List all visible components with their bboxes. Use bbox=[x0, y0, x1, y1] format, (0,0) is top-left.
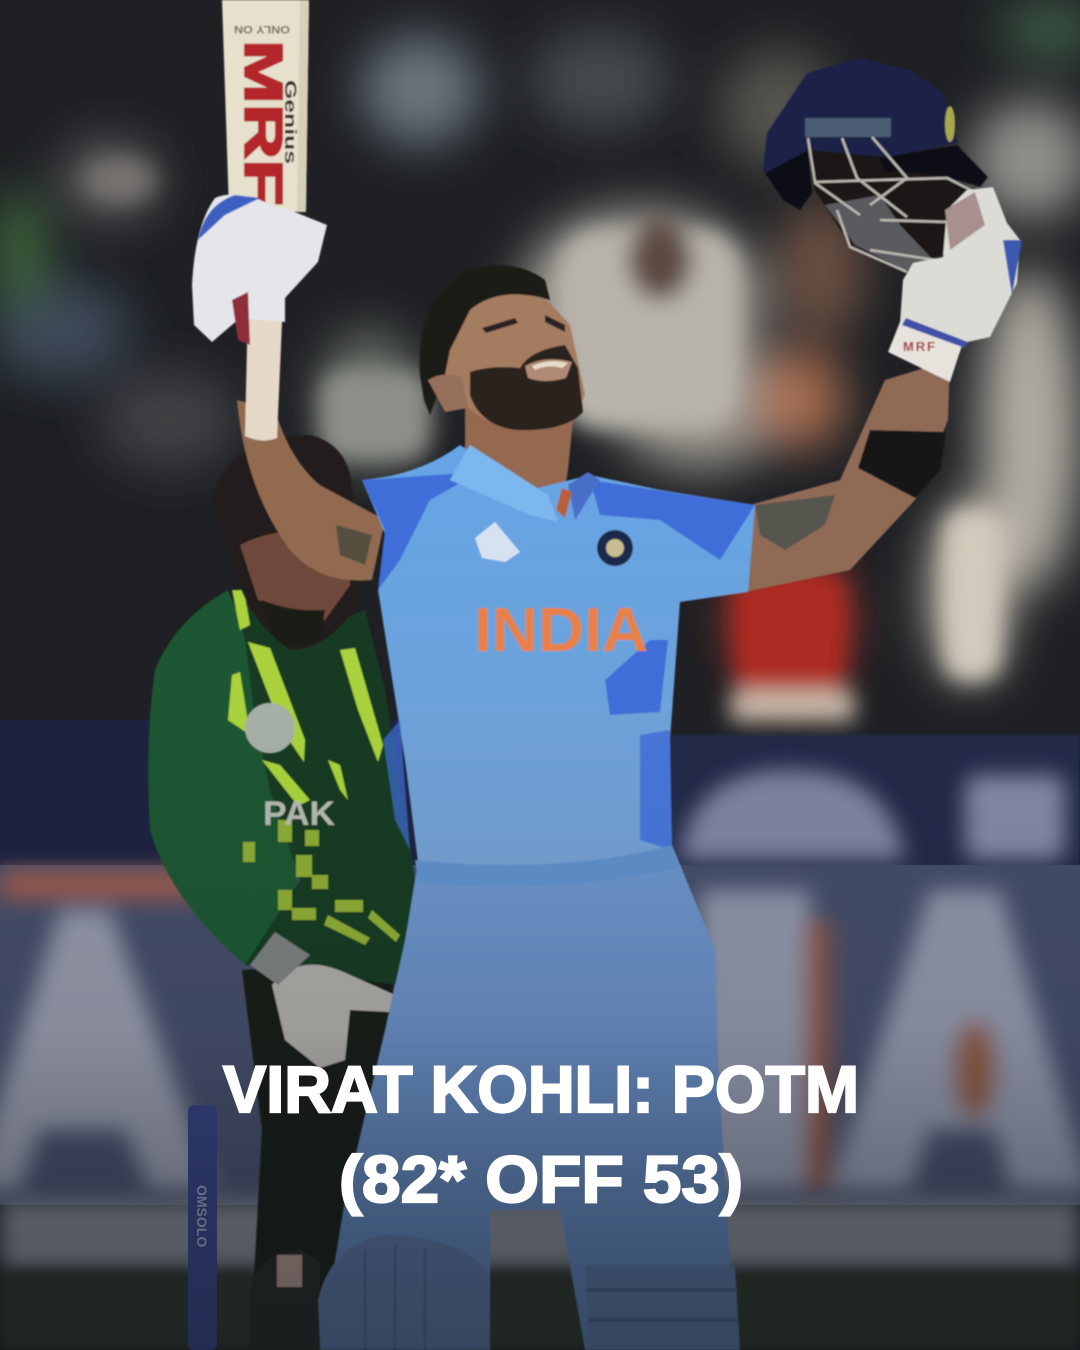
keeper legs bbox=[242, 960, 395, 1350]
tournament logo bbox=[475, 522, 520, 562]
head bbox=[420, 265, 585, 430]
helmet back flap bbox=[765, 150, 812, 210]
player: Pakistan wicketkeeper bbox=[148, 435, 415, 1350]
neck bbox=[465, 400, 575, 520]
jersey word: INDIA bbox=[474, 596, 648, 665]
player: Virat Kohli: MRF bbox=[903, 339, 935, 354]
glove cuff bbox=[888, 322, 962, 382]
stump: OMSOLO bbox=[194, 1185, 210, 1247]
bat bbox=[222, 0, 309, 212]
jersey bbox=[362, 445, 755, 866]
helmet peak bbox=[880, 145, 988, 187]
wristband bbox=[858, 430, 946, 498]
background: blurred stadium crowd bbox=[0, 0, 1080, 760]
left forearm bbox=[745, 360, 950, 592]
background: advertising boards bbox=[0, 720, 1080, 1350]
title line 1: VIRAT KOHLI: POTM bbox=[223, 1052, 859, 1126]
keeper chest text: PAK bbox=[263, 795, 335, 833]
hair bbox=[420, 265, 550, 415]
title line 2: (82* OFF 53) bbox=[339, 1142, 743, 1216]
raised right arm bbox=[237, 400, 385, 581]
player: Virat Kohli bbox=[192, 0, 1022, 1350]
beard bbox=[470, 345, 583, 430]
helmet interior bbox=[808, 135, 975, 272]
right pad bbox=[585, 1265, 740, 1350]
keeper glove bbox=[272, 965, 395, 1068]
bat logo: MRF bbox=[233, 40, 293, 206]
helmet bbox=[763, 58, 988, 272]
headline bbox=[223, 1052, 859, 1216]
waistband bbox=[415, 845, 678, 886]
trousers bbox=[320, 845, 735, 1350]
bat label: Genius bbox=[281, 80, 300, 164]
stump bbox=[188, 1105, 217, 1350]
right glove bbox=[192, 194, 327, 342]
eyebrows bbox=[482, 315, 565, 333]
bat handle bbox=[245, 300, 283, 441]
helmet plate bbox=[805, 118, 891, 137]
keeper chest bbox=[240, 600, 415, 985]
india crest bbox=[597, 530, 633, 566]
bottom shade bbox=[0, 700, 1080, 1350]
helmet badge bbox=[945, 106, 955, 142]
keeper jersey stripes bbox=[228, 590, 383, 806]
ear bbox=[428, 374, 468, 412]
mouth bbox=[525, 359, 572, 381]
keeper head bbox=[212, 435, 360, 650]
left glove bbox=[890, 187, 1020, 380]
left pad bbox=[318, 1235, 490, 1350]
keeper badge bbox=[245, 703, 295, 753]
bat small label: ONLY ON bbox=[234, 23, 290, 35]
helmet dome bbox=[763, 58, 958, 210]
keeper pads bbox=[250, 1250, 320, 1350]
collar bbox=[450, 445, 558, 522]
jersey shoulder shading bbox=[362, 472, 755, 850]
helmet grille bbox=[808, 137, 977, 272]
keeper sleeve bbox=[148, 590, 300, 965]
